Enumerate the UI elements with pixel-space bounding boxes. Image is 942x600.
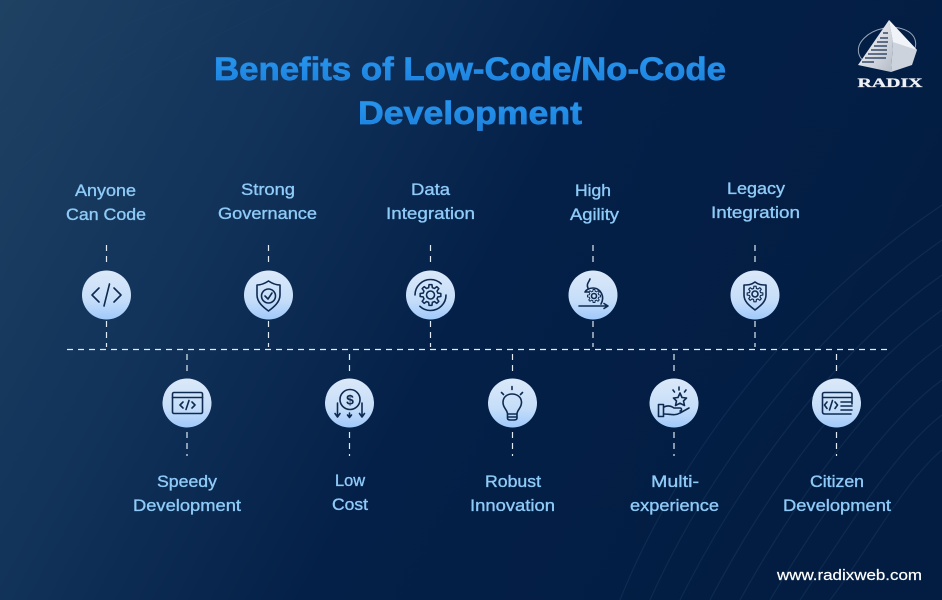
item: Citizen Development — [783, 354, 891, 515]
item: Multi-experience: Multi- — [651, 472, 699, 491]
item: Legacy Integration — [711, 179, 800, 347]
item: Speedy Development: Speedy — [157, 472, 218, 491]
item: Anyone Can Code: Can Code — [66, 205, 146, 224]
item: High Agility — [568, 181, 620, 347]
item: Robust Innovation: Innovation — [470, 496, 555, 515]
item: Citizen Development: Citizen — [810, 472, 864, 491]
website url: www.radixweb.com — [776, 568, 922, 584]
item: High Agility: Agility — [570, 205, 620, 224]
item: Low Cost: Low — [335, 471, 366, 490]
item: Data Integration: Integration — [386, 204, 475, 223]
item: Low Cost: $ — [346, 392, 354, 408]
item: Data Integration — [386, 180, 475, 347]
item: Multi-experience: experience — [630, 496, 719, 515]
item: Anyone Can Code: Anyone — [75, 181, 136, 200]
item: Legacy Integration: Legacy — [727, 179, 786, 198]
title — [214, 51, 726, 131]
item: Citizen Development: Development — [783, 496, 891, 515]
item: Strong Governance — [218, 180, 317, 347]
item: Low Cost — [325, 354, 374, 514]
item: Multi-experience — [630, 354, 719, 515]
item: Speedy Development — [133, 354, 241, 515]
item: Low Cost: Cost — [332, 495, 368, 514]
title: Development — [358, 95, 582, 131]
logo: Radix — [855, 20, 923, 90]
item: Robust Innovation: Robust — [485, 472, 541, 491]
logo: Radix: RADIX — [858, 75, 923, 90]
item: Legacy Integration: Integration — [711, 203, 800, 222]
item: Data Integration: Data — [411, 180, 451, 199]
central timeline — [67, 348, 892, 350]
item: High Agility: High — [575, 181, 611, 200]
title: Benefits of Low-Code/No-Code — [214, 51, 726, 87]
item: Anyone Can Code — [66, 181, 146, 347]
item: Speedy Development: Development — [133, 496, 241, 515]
item: Robust Innovation — [470, 354, 555, 515]
item: Strong Governance: Strong — [241, 180, 295, 199]
item: Strong Governance: Governance — [218, 204, 317, 223]
